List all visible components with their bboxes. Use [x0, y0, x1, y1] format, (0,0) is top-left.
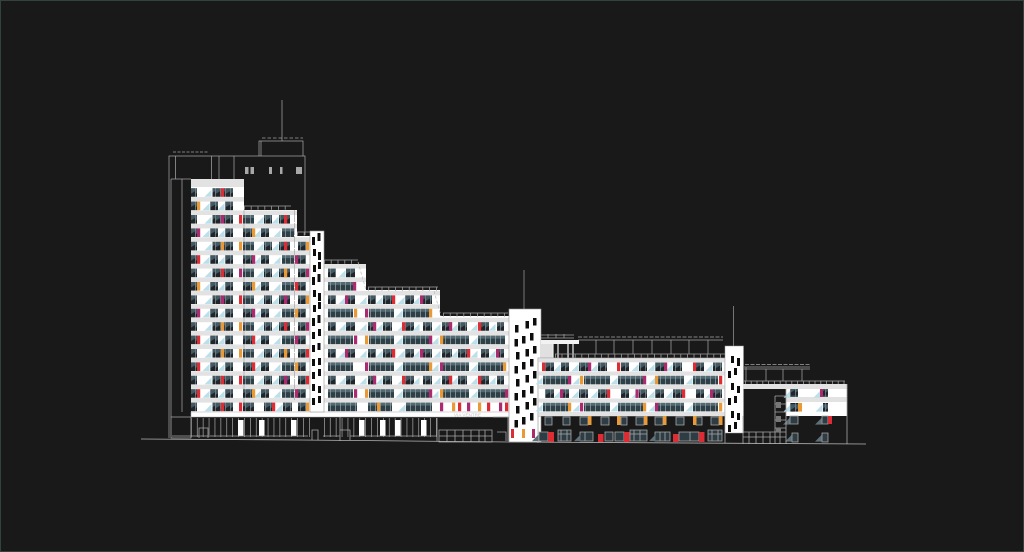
tower windows [312, 233, 321, 405]
grey floor bands [191, 179, 509, 403]
tall rear tower outline [169, 100, 305, 438]
row 3 [545, 389, 722, 398]
white ground floor panels [238, 420, 426, 436]
rooftop antenna [281, 100, 283, 141]
window rows, stepped block [191, 188, 508, 411]
floor 3 [191, 215, 290, 224]
right wing pergola [743, 367, 845, 381]
tower mass [725, 346, 744, 433]
floor 5 [191, 242, 309, 250]
rooftop plant box [259, 141, 303, 156]
red doors [548, 432, 704, 442]
floor 12 [191, 336, 505, 344]
floor 1 [191, 188, 233, 197]
lower row frames [539, 430, 722, 441]
lower building mass [538, 358, 725, 416]
floor 14 [191, 362, 506, 371]
white podium strip with sign [191, 412, 514, 417]
row 1 [542, 362, 722, 371]
roof railings, stepped block [244, 206, 508, 316]
right wing windows [784, 389, 828, 412]
tower antenna [732, 306, 734, 346]
tower windows [728, 356, 740, 432]
right wing [743, 364, 847, 444]
floor 15 [191, 376, 504, 384]
tower coloured slots [511, 429, 535, 438]
tower mass [509, 309, 541, 442]
lower white building [536, 358, 725, 416]
floor 8 [191, 282, 356, 291]
floor 6 [191, 255, 306, 264]
stair tower 2 [509, 270, 541, 442]
roof box [541, 340, 579, 344]
ground floor, left section [171, 417, 437, 441]
lower row mullions and end walls [538, 416, 725, 443]
right wing ground windows [783, 416, 832, 442]
tower mass [310, 231, 324, 412]
right wing top band [743, 384, 847, 389]
ground line [141, 439, 866, 444]
floor 16 [191, 389, 508, 398]
tower antenna [523, 270, 525, 309]
roof railing [555, 353, 725, 355]
floor 7 [191, 269, 355, 277]
pergola rail and posts [541, 334, 723, 354]
floor 4 [191, 228, 294, 237]
floor 11 [191, 322, 504, 331]
main stepped white facade [191, 179, 509, 412]
floor 9 [191, 295, 432, 304]
right wing white floors [786, 389, 847, 416]
facade mass [191, 179, 509, 412]
fire stair and fence [743, 384, 847, 444]
row 2 [536, 376, 722, 384]
sign text: VIA VENTRE [454, 412, 481, 417]
rear tower frame [169, 156, 305, 438]
stair tower 3 [725, 306, 744, 433]
tower windows [514, 318, 536, 428]
facade joint lines [244, 210, 294, 410]
rear tower small windows [245, 167, 302, 174]
upper row window frames [545, 417, 719, 425]
floor 2 [191, 202, 233, 210]
row 4 [536, 403, 722, 411]
ground fence and entrance, centre [439, 417, 508, 442]
floor 17 [191, 403, 508, 411]
dark glazing triangles [532, 434, 656, 441]
lower building bands [538, 358, 725, 416]
doors and frames [171, 417, 437, 441]
floor 10 [191, 309, 432, 317]
floor 13 [191, 349, 504, 358]
lower building ground storeys [532, 416, 725, 443]
orange slots [588, 416, 722, 425]
stair tower 1 [310, 231, 324, 412]
ground floor mullions [191, 418, 310, 437]
roof pergola, lower building [541, 334, 725, 358]
